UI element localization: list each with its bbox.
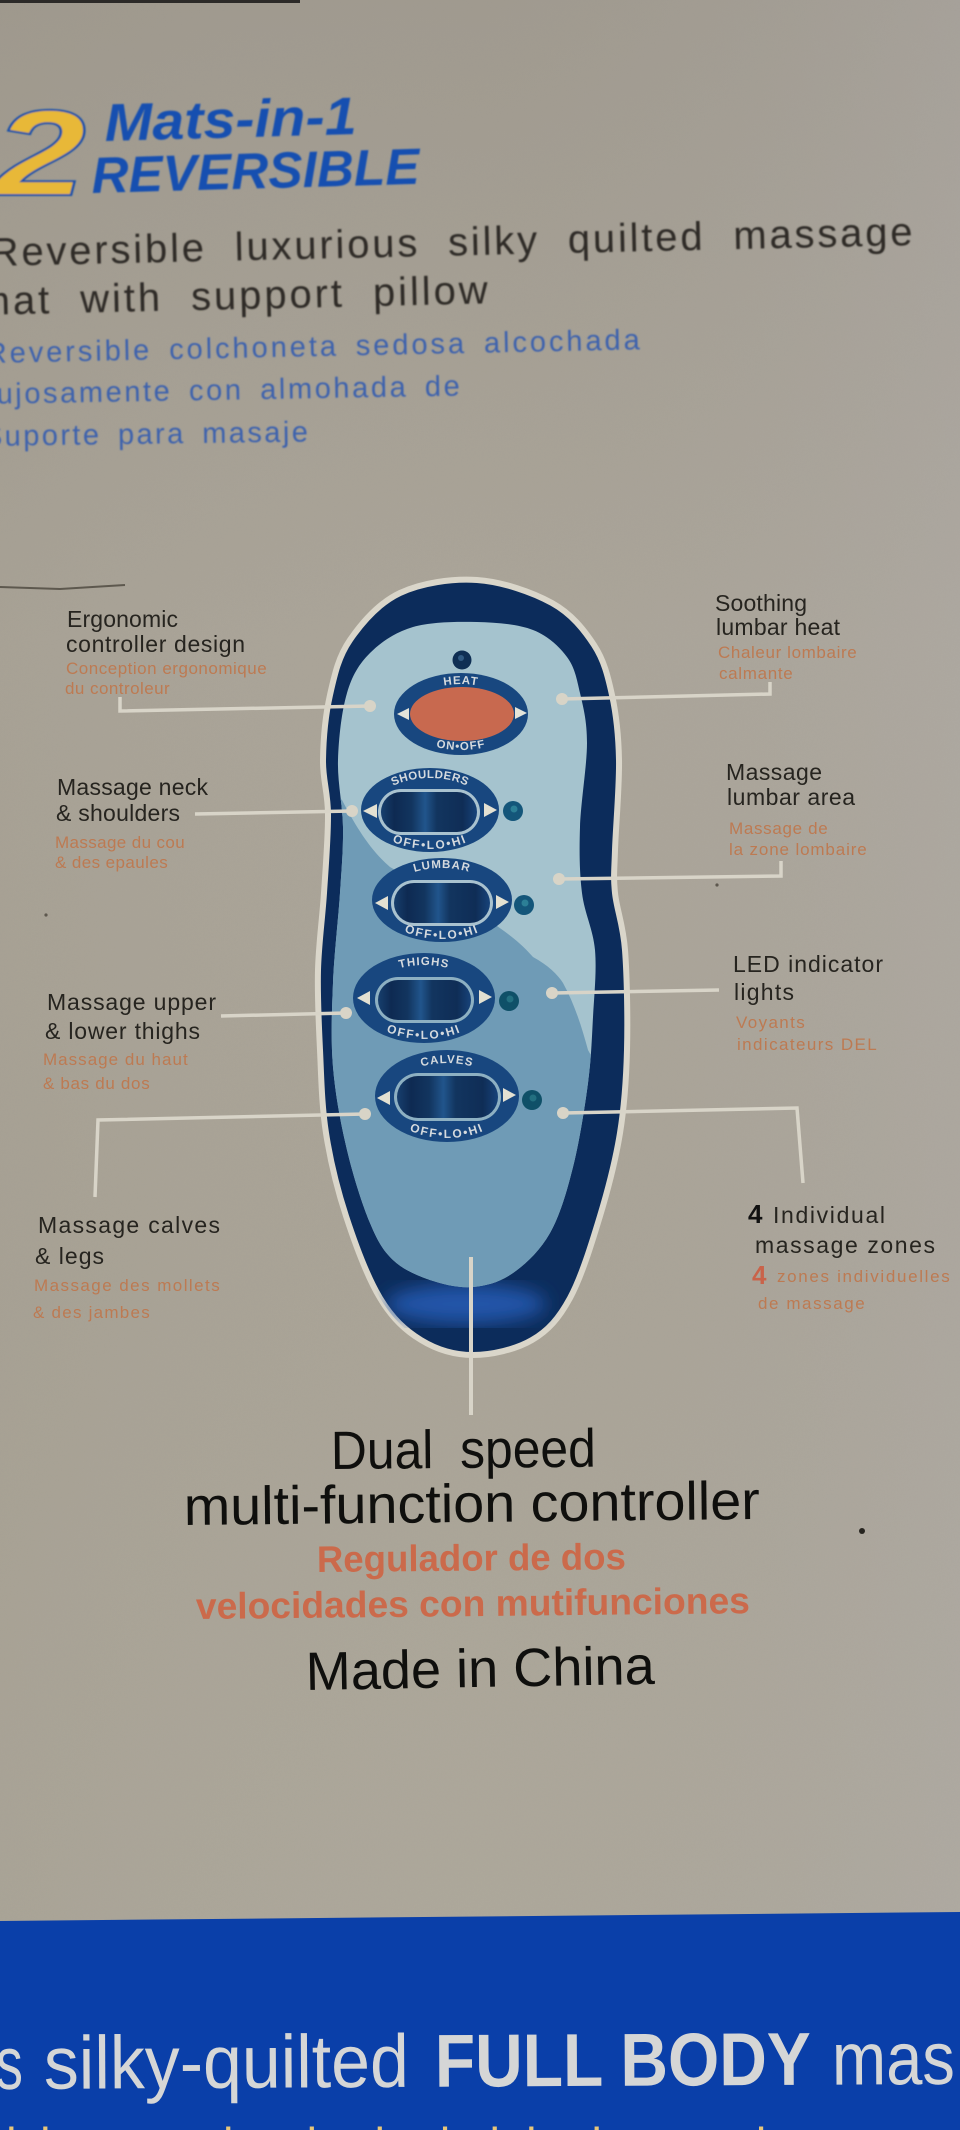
button: calves [375,1050,519,1142]
button: thighs: OFF•LO•HI [388,1024,460,1039]
caption: dual speed controller: Dual speed [331,1419,596,1481]
button: heat: ON•OFF [437,740,484,750]
callout: massage lumbar area: Massage de [729,819,828,838]
callout: soothing lumbar heat: Soothing [715,590,807,616]
callout: massage calves and legs: Massage calves [38,1212,220,1238]
callout: LED indicator lights [546,951,883,1054]
description: Spanish [0,324,641,453]
heading line 1: Mats-in-1 [104,87,357,153]
callout: massage neck and shoulders: & des epaules [55,853,168,872]
button: shoulders: SHOULDERS [391,770,468,785]
callout: ergonomic controller design: Conception ergonomique [66,659,267,678]
description: English: Reversible luxurious silky quilted massage [0,210,913,275]
callout: soothing lumbar heat: calmante [719,664,793,683]
leader: controller centre line [469,1257,473,1415]
button: heat [394,673,528,755]
callout: LED indicator lights: indicateurs DEL [737,1035,877,1054]
base highlight [386,1284,546,1324]
callout: massage lumbar area [553,759,867,885]
callout: soothing lumbar heat [556,590,857,705]
button: lumbar: LUMBAR [413,860,470,872]
callout: massage lumbar area: la zone lombaire [729,840,867,859]
button: heat: HEAT [444,676,478,686]
button: thighs: THIGHS [398,956,448,968]
band headline [0,2016,955,2105]
callout: ergonomic controller design: Ergonomic [67,606,178,632]
LED: shoulders [503,801,523,821]
callout: massage upper and lower thighs: & bas du dos [43,1074,150,1093]
controller body [318,580,627,1355]
button: calves: CALVES [420,1055,472,1066]
title: 2 Mats-in-1 Reversible [0,85,422,221]
description: Spanish: Reversible colchoneta sedosa alcochada [0,324,641,370]
band sub-line [0,2118,960,2130]
controller illustration [314,576,630,1358]
callout: 4 individual massage zones: massage zones [755,1232,935,1258]
callout: LED indicator lights: Voyants [736,1013,805,1032]
band headline: FULL BODY [435,2017,811,2103]
callout: massage neck and shoulders: Massage neck [57,774,208,800]
callout: massage neck and shoulders [55,774,358,872]
button: shoulders: OFF•LO•HI [394,835,466,849]
callout: 4 individual massage zones [557,1107,950,1313]
callout: 4 individual massage zones: 4 [748,1199,763,1229]
face panel [332,622,596,1288]
callout: 4 individual massage zones: zones individuelles [777,1267,950,1286]
button: lumbar [372,858,512,942]
callout: massage upper and lower thighs [43,989,352,1093]
callout: massage lumbar area: lumbar area [727,784,855,810]
callout: ergonomic controller design: controller design [66,631,245,657]
callout: massage calves and legs: Massage des mollets [34,1276,220,1295]
callout: 4 individual massage zones: Individual [773,1202,885,1228]
LED: calves [522,1090,542,1110]
callout: massage calves and legs: & legs [35,1243,104,1269]
callout: soothing lumbar heat: lumbar heat [716,614,841,640]
band headline: silky-quilted [44,2019,409,2105]
description: English [0,210,913,324]
callout: massage neck and shoulders: Massage du cou [55,833,185,852]
callout: massage upper and lower thighs: & lower thighs [45,1018,200,1044]
callout: soothing lumbar heat: Chaleur lombaire [718,643,857,662]
callout: ergonomic controller design [65,606,376,712]
button: calves: OFF•LO•HI [410,1124,482,1138]
callout: ergonomic controller design: du controleur [65,679,170,698]
callout: massage neck and shoulders: & shoulders [56,800,180,826]
caption: dual speed controller: multi-function controller [183,1471,760,1537]
button: shoulders [361,768,499,852]
caption: dual speed controller [183,1419,760,1537]
caption: Spanish: velocidades con mutifunciones [196,1580,750,1627]
caption: Spanish [196,1536,750,1627]
bottom blue band [0,1912,960,2130]
callout: 4 individual massage zones: de massage [758,1294,865,1313]
callout: LED indicator lights: LED indicator [733,951,883,977]
heading line 2: REVERSIBLE [91,138,422,204]
callout: massage calves and legs: & des jambes [33,1303,150,1322]
LED: thighs [499,991,519,1011]
made in China: Made in China [305,1636,656,1702]
LED: lumbar [514,895,534,915]
LED: heat [452,650,472,670]
button: thighs [353,953,495,1043]
caption: Spanish: Regulador de dos [317,1536,626,1580]
callout: massage lumbar area: Massage [726,759,822,785]
button: lumbar: OFF•LO•HI [406,925,478,939]
callout: 4 individual massage zones: 4 [752,1260,767,1290]
callout: LED indicator lights: lights [734,979,794,1005]
callout: massage calves and legs [33,1108,371,1322]
callout: massage upper and lower thighs: Massage upper [47,989,216,1015]
callout: massage upper and lower thighs: Massage du haut [43,1050,188,1069]
